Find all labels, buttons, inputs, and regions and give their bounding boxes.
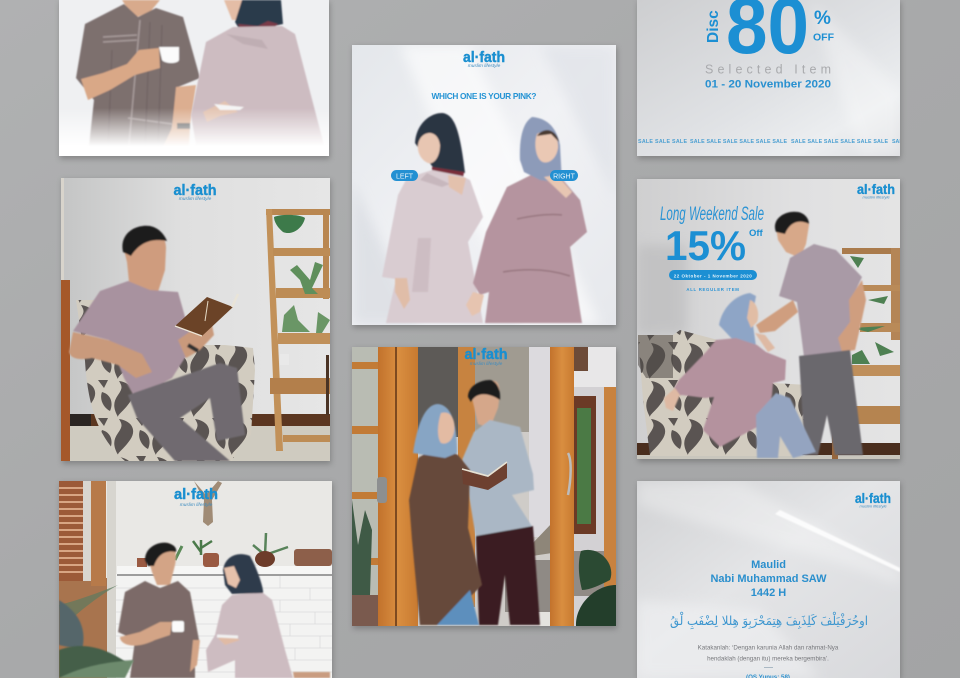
panel: disc 80 percent (637, 0, 907, 159)
translation: hendaklah (dengan itu) mereka bergembira’. (707, 656, 829, 662)
translation: Katakanlah: ‘Dengan karunia Allah dan rahmat-Nya (698, 644, 839, 652)
man with book (462, 380, 540, 625)
sale strip: SALE SALE SALE SALE SALE SALE (690, 139, 787, 145)
date pill (669, 270, 757, 280)
sale strip (638, 139, 907, 145)
sofa (638, 330, 808, 456)
man standing (756, 212, 866, 455)
book (462, 462, 507, 490)
coffee cup (172, 621, 184, 632)
panel: kitchen couple (59, 481, 333, 678)
panel: couple with coffee cup (59, 0, 330, 159)
headline script: Long Weekend Sale (660, 204, 764, 225)
panel: which one is your pink (352, 45, 617, 328)
wall socket (280, 354, 289, 365)
woman seated (664, 293, 816, 458)
logo: muslim lifestyle (859, 504, 887, 508)
sofa (505, 523, 604, 626)
label: right (550, 170, 578, 181)
note: ALL REGULER ITEM (686, 287, 740, 292)
woman (206, 554, 330, 678)
logo: al·fath (857, 182, 895, 197)
logo: muslim lifestyle (862, 194, 890, 200)
coffee cup (159, 47, 179, 63)
sale strip: SALE SALE SALE (638, 139, 687, 145)
woman in pink dress (191, 0, 326, 156)
left model in pale pink (382, 113, 483, 323)
label: left: LEFT (396, 173, 414, 180)
shutters and timber (59, 481, 116, 678)
skull ornament (194, 481, 222, 526)
title: Maulid (751, 559, 786, 571)
woman in brown (409, 404, 482, 625)
logo: al·fath (174, 182, 216, 199)
15 percent: Off (749, 228, 764, 239)
shelf with plants (117, 533, 332, 576)
15 percent: 15% (665, 222, 746, 269)
date: 01 - 20 November 2020 (705, 78, 831, 90)
foreground plant (59, 585, 134, 678)
seated man (69, 226, 245, 461)
right model in dusty rose (466, 117, 587, 323)
logo: al·fath (463, 49, 505, 66)
panel: couple at door (352, 346, 617, 629)
sale strip: SALE SALE SALE SALE SALE SALE (791, 139, 888, 145)
logo: muslim lifestyle (180, 502, 213, 508)
logo: al·fath (855, 491, 891, 506)
title: Nabi Muhammad SAW (710, 573, 827, 585)
man (118, 543, 200, 678)
title: 1442 H (751, 587, 786, 599)
book (175, 294, 238, 336)
right door (550, 347, 574, 626)
left door frame (352, 347, 475, 626)
label: right: RIGHT (553, 173, 576, 180)
discount figure: Disc (705, 10, 722, 43)
sale strip: SALE (892, 139, 907, 145)
discount figure (705, 0, 835, 70)
arabic verse: قُلْ بِفَضْلِ اللهِ وَبِرَحْمَتِهِ فَبِذَلِكَ فَلْيَفْرَحُوا (670, 610, 868, 629)
patterned armchair (76, 300, 255, 461)
logo: al·fath (174, 486, 218, 503)
panel: maulid greeting (637, 481, 901, 678)
label: left (391, 170, 418, 181)
logo: muslim lifestyle (179, 196, 212, 202)
title (710, 559, 827, 599)
logo: muslim lifestyle (468, 63, 501, 69)
divider (764, 667, 773, 668)
man in striped shirt (76, 0, 200, 156)
wooden shelf (266, 209, 330, 451)
heading: WHICH ONE IS YOUR PINK? (432, 91, 536, 101)
plants (352, 500, 616, 626)
white tile wall (115, 574, 332, 678)
panel: long weekend sale (637, 179, 901, 462)
wooden shelf (832, 248, 900, 459)
date pill: 22 Oktober - 1 November 2020 (674, 273, 752, 278)
discount figure: % (814, 8, 831, 29)
logo: muslim lifestyle (470, 361, 503, 367)
translation (698, 644, 839, 662)
logo: al·fath (464, 346, 508, 363)
discount figure: OFF (813, 32, 835, 44)
selected item: Selected Item (705, 62, 831, 76)
panel: man reading on chair (61, 178, 331, 464)
